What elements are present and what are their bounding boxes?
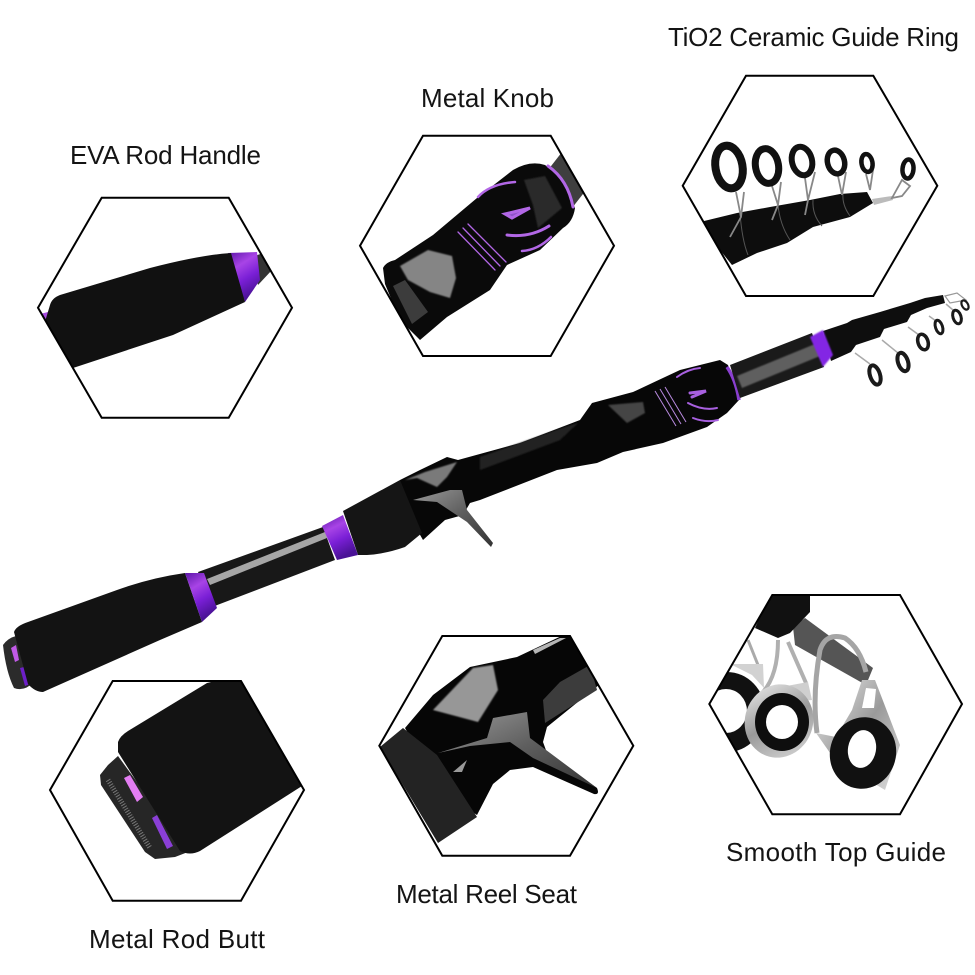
icon: guide feet <box>730 170 910 237</box>
carbon shaft highlight <box>207 532 327 585</box>
icon: middle guide ring <box>744 640 814 758</box>
purple collar front <box>322 515 358 560</box>
panel: EVA rod handle <box>30 198 292 418</box>
carbon shaft <box>198 527 335 607</box>
telescopic sections <box>823 295 945 361</box>
purple collar rear <box>185 573 217 622</box>
guide ring 3 <box>908 327 930 351</box>
tip guide <box>945 293 970 311</box>
seat body upper band <box>480 423 578 470</box>
heading: Metal Reel Seat: Metal Reel Seat <box>396 879 578 909</box>
icon: purple flame accents <box>458 166 573 270</box>
guide ring 2 <box>882 340 911 373</box>
icon: trigger silver <box>438 712 597 788</box>
guide ring 1 <box>855 353 883 386</box>
icon: foam grip <box>118 675 302 854</box>
hexagon frame <box>379 636 633 856</box>
icon: front gloss facet <box>393 280 428 324</box>
hexagon frame <box>709 595 962 814</box>
icon: carbon section behind handle collar <box>257 254 270 285</box>
reel seat and mid section <box>400 360 739 540</box>
rod butt purple <box>11 645 19 662</box>
guide rings on rod <box>855 293 970 386</box>
knob purple edge <box>727 367 739 400</box>
icon: wire loop of top guide <box>815 636 866 733</box>
hexagon frame <box>360 136 614 356</box>
hexagon frame <box>50 681 304 901</box>
knob rings <box>655 387 686 426</box>
icon: top highlight <box>533 638 566 654</box>
heading: EVA Rod Handle: EVA Rod Handle <box>70 140 261 170</box>
icon: section seams <box>740 194 850 255</box>
panel: metal rod butt <box>50 675 304 901</box>
icon: purple band <box>124 775 143 802</box>
heading: Metal Rod Butt: Metal Rod Butt <box>89 924 266 954</box>
icon: small facet <box>453 760 467 772</box>
knob gloss <box>608 402 645 423</box>
icon: knurled butt cap <box>100 756 188 859</box>
heading: TiO2 Ceramic Guide Ring: TiO2 Ceramic Guide Ring <box>668 22 959 52</box>
rod butt purple lower <box>20 667 30 686</box>
heading: Smooth Top Guide: Smooth Top Guide <box>726 837 946 867</box>
rod butt cap <box>3 636 34 689</box>
panel: smooth top guide <box>689 590 962 814</box>
purple collar upper <box>810 330 833 367</box>
icon: knob body <box>383 163 575 340</box>
icon: left guide ring <box>718 640 764 751</box>
icon: purple collar <box>228 252 260 302</box>
trigger <box>413 490 493 547</box>
icon: rod end <box>793 618 873 685</box>
icon: black cap <box>755 596 810 638</box>
icon: reel seat body <box>405 632 605 815</box>
icon: knurling <box>108 780 150 848</box>
guide ring 4 <box>929 316 944 335</box>
reel seat gloss <box>405 462 457 487</box>
icon: rod sections <box>700 192 873 265</box>
icon: matte end cap <box>380 728 477 843</box>
panel: metal knob <box>360 136 614 356</box>
rear foam handle <box>14 573 202 692</box>
icon: tip section <box>872 196 893 205</box>
heading: Metal Knob: Metal Knob <box>421 83 554 113</box>
icon: carbon rod segment <box>543 665 597 723</box>
icon: purple band lower <box>152 815 173 849</box>
knob flame accents <box>677 368 718 421</box>
icon: knob upper shine <box>524 176 562 228</box>
icon: foam grip <box>46 253 245 368</box>
panel: ceramic guide rings <box>683 76 937 296</box>
icon: glossy highlight <box>433 665 498 722</box>
hexagon frame <box>38 198 292 418</box>
icon: carbon rod end <box>550 154 583 206</box>
icon: frame cut-out <box>862 688 876 708</box>
panel: metal reel seat <box>379 632 633 856</box>
main fishing rod <box>3 293 970 692</box>
icon: purple end cap <box>42 312 48 320</box>
fore grip <box>343 480 422 555</box>
icon: gloss highlight <box>400 250 456 298</box>
icon: top guide frame <box>816 680 900 790</box>
upper carbon highlight <box>737 344 820 388</box>
icon: top guide ring <box>822 710 904 796</box>
upper carbon shaft <box>730 333 824 398</box>
icon: guide rings <box>712 143 914 191</box>
hexagon frame <box>683 76 937 296</box>
icon: ring hole <box>845 728 879 770</box>
guide ring 5 <box>946 304 963 325</box>
